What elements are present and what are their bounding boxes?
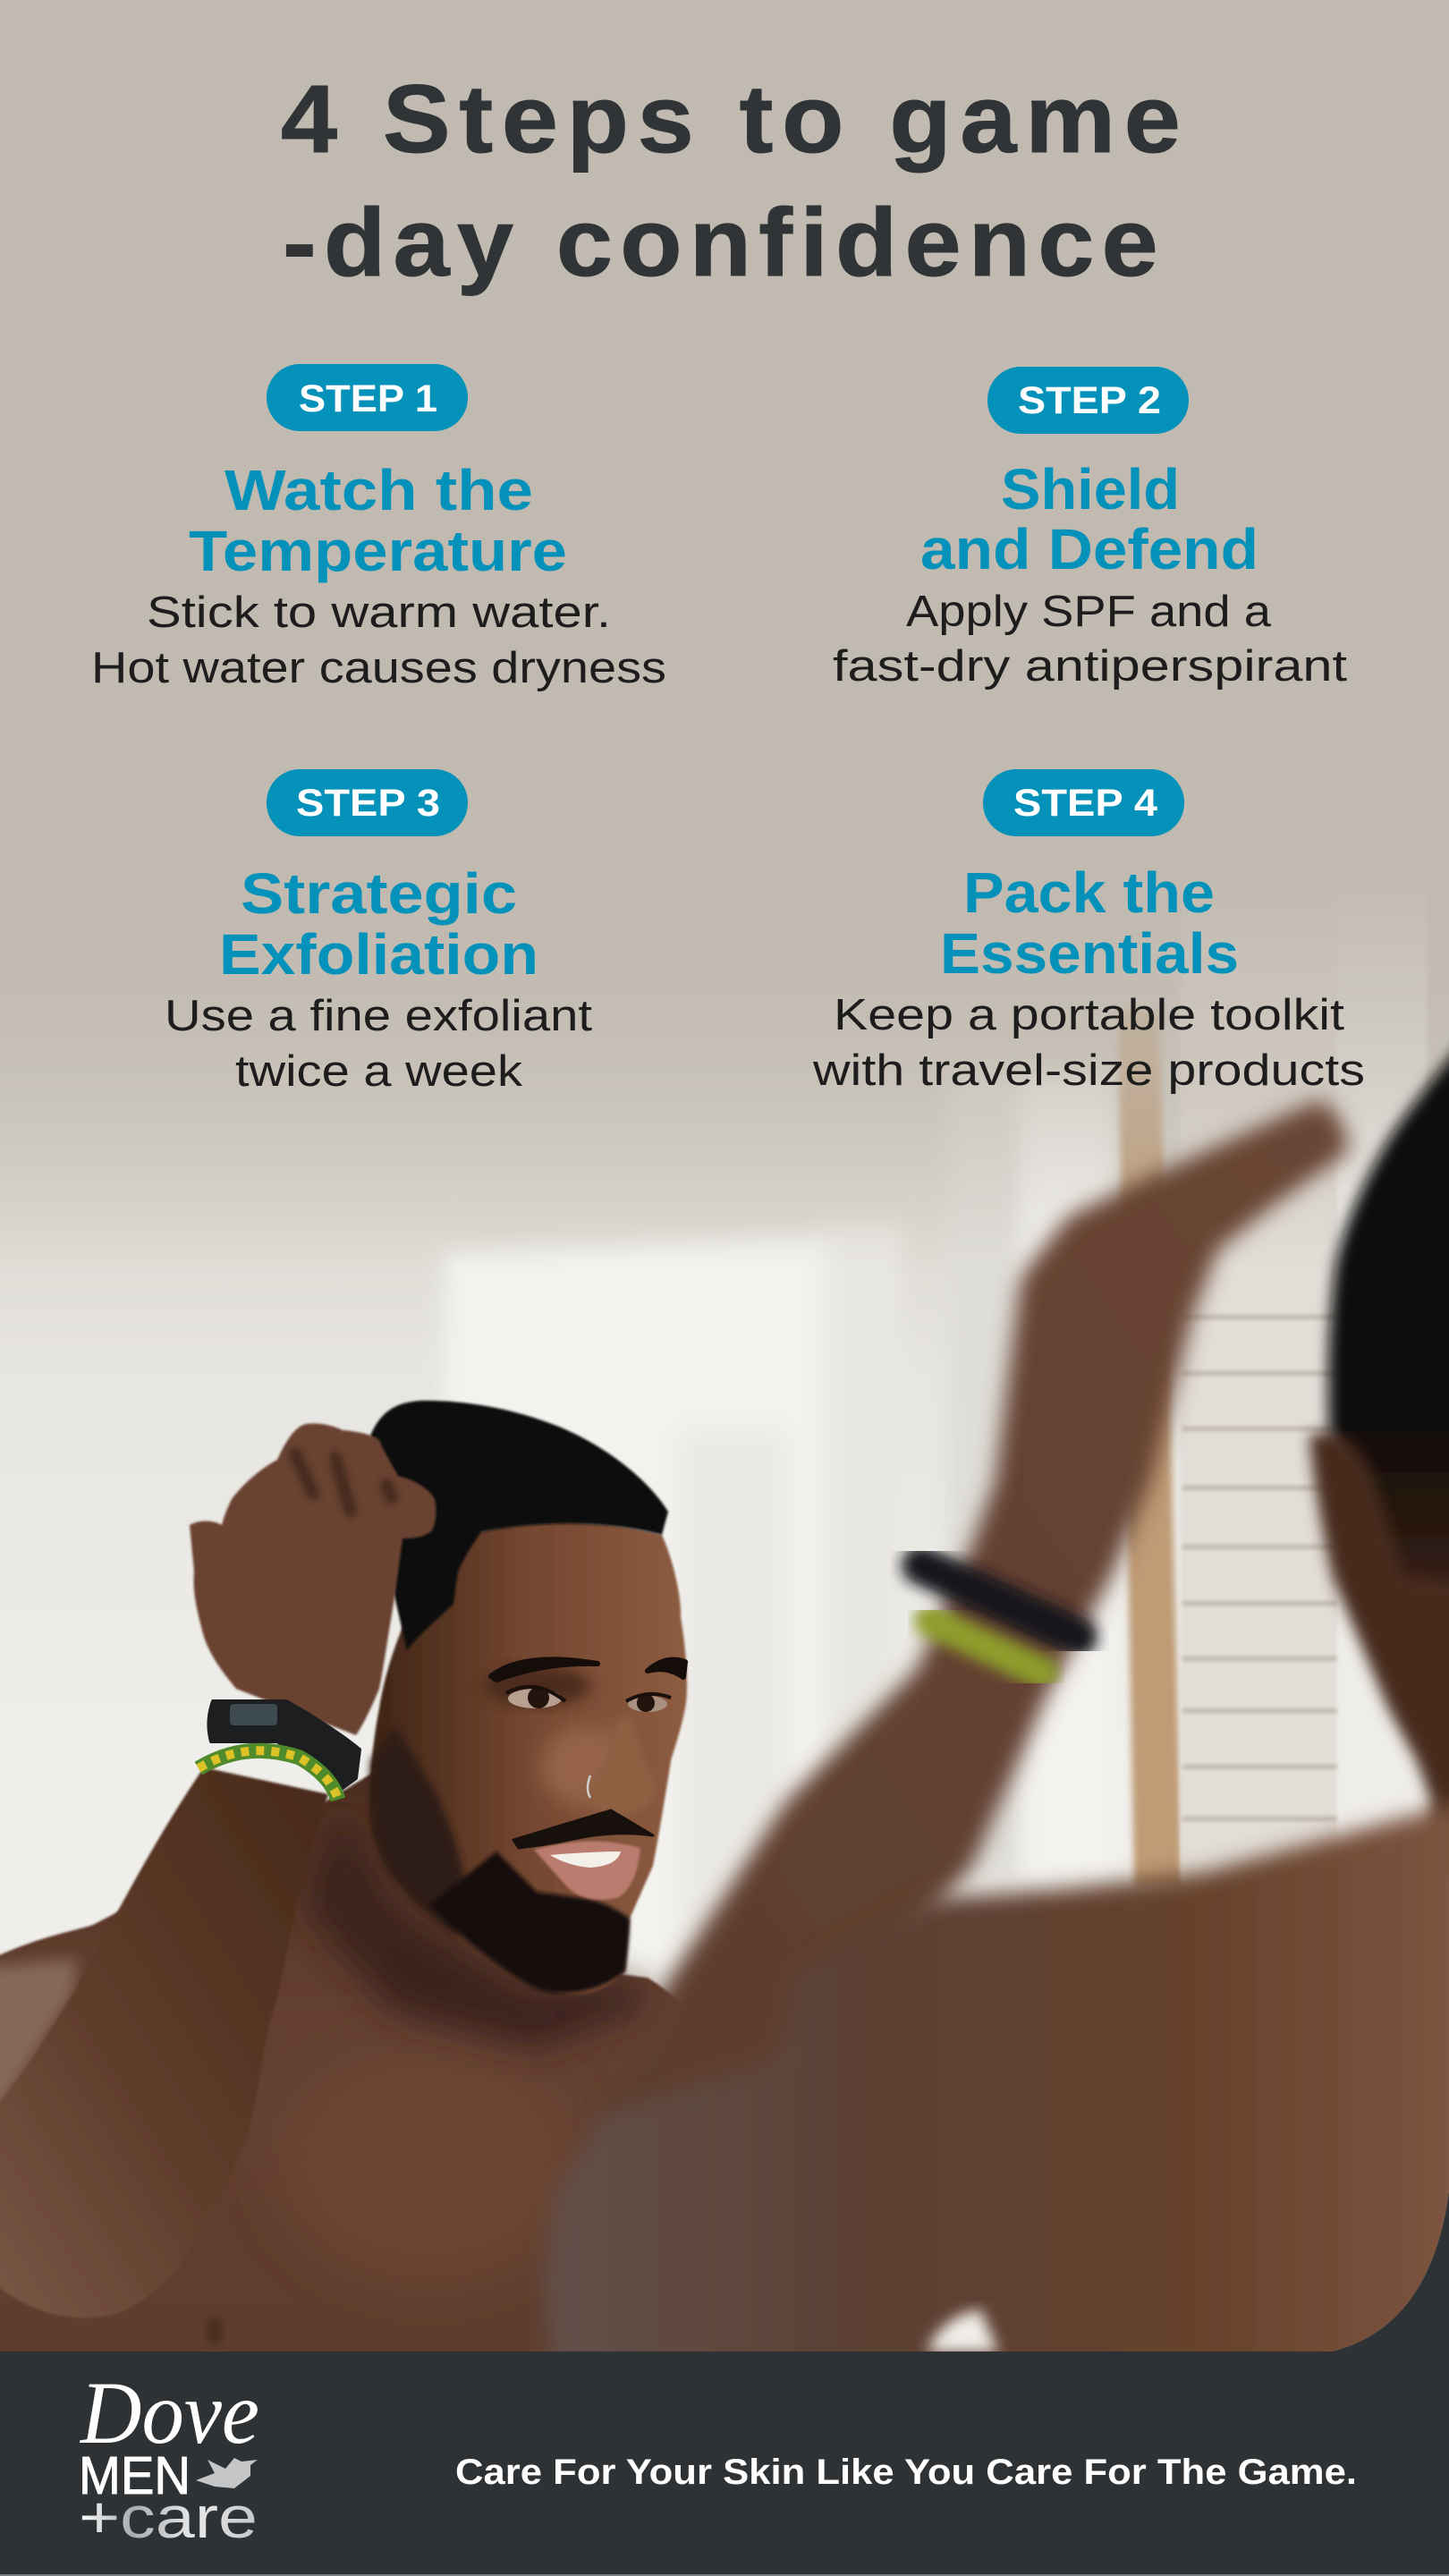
raised arm (0, 1767, 328, 2318)
title (281, 65, 1181, 296)
heading: step 2 (920, 457, 1258, 581)
torso (0, 1773, 676, 2351)
back of head (1328, 1038, 1449, 1601)
cheek highlight (541, 1726, 631, 1807)
background photo panel (0, 941, 1449, 2351)
heading: step 1 (189, 458, 567, 583)
neck shadow (304, 1807, 653, 2048)
body text: step 4: Keep a portable toolkit (834, 991, 1344, 1039)
shutter slats (1179, 950, 1427, 1882)
mouth (534, 1841, 640, 1900)
wall background (0, 1076, 1449, 2349)
heading: step 3: Exfoliation (219, 922, 538, 987)
logo wordmark: +care: +care (79, 2484, 258, 2550)
logo: Dove Men+Care (79, 2363, 259, 2550)
blurred black wristband (921, 1565, 1078, 1637)
body text: step 2: fast-dry antiperspirant (833, 642, 1347, 691)
man in mirror (0, 1401, 716, 2379)
heading: step 3: Strategic (241, 861, 517, 926)
heading: step 2: Shield (1001, 457, 1180, 521)
panel: step 2 (833, 367, 1347, 691)
body text: step 2 (833, 588, 1347, 691)
hair (370, 1401, 668, 1650)
title: 4 Steps to game (281, 65, 1181, 173)
panel: step 3 (165, 769, 592, 1096)
watch screen (230, 1704, 277, 1725)
ear and neck (1309, 1433, 1449, 1878)
eye socket shading (483, 1666, 590, 1706)
nose (586, 1717, 656, 1816)
body text: step 2: Apply SPF and a (906, 588, 1272, 636)
blurred green bracelet (930, 1621, 1042, 1673)
knuckles (295, 1453, 392, 1512)
blurred foreground figure (543, 1038, 1449, 2379)
sideburn stubble (370, 1726, 465, 1936)
bracelet (199, 1750, 338, 1800)
tagline: Care For Your Skin Like You Care For The Game. (455, 2453, 1357, 2492)
icon: dove bird (196, 2458, 258, 2488)
body text: step 4: with travel-size products (812, 1046, 1365, 1095)
badge: step 3: STEP 3 (296, 782, 440, 825)
badge: step 2 (987, 367, 1189, 434)
body text: step 1 (91, 589, 666, 692)
face (369, 1522, 687, 1995)
heading: step 4: Pack the (963, 860, 1215, 925)
blurred window frame (948, 1073, 1118, 1878)
far shoulder highlight (0, 1953, 81, 2102)
body text: step 3 (165, 992, 592, 1096)
panel: step 1 (91, 364, 666, 692)
nipple (206, 2317, 224, 2345)
heading: step 1: Watch the (225, 458, 533, 522)
eyes (506, 1687, 671, 1712)
watch (208, 1701, 360, 1792)
body text: step 1: Hot water causes dryness (91, 644, 666, 692)
badge: step 2: STEP 2 (1018, 379, 1161, 422)
logo wordmark: Dove: Dove (79, 2363, 259, 2462)
heading: step 1: Temperature (189, 519, 567, 583)
badge: step 4: STEP 4 (1013, 782, 1157, 825)
badge: step 4 (983, 769, 1184, 836)
chin beard (429, 1852, 630, 1993)
tan top fade (0, 803, 1449, 1229)
chest highlight (297, 2085, 553, 2267)
heading: step 2: and Defend (920, 517, 1258, 581)
body text: step 1: Stick to warm water. (147, 589, 611, 637)
teeth (550, 1852, 621, 1868)
badge: step 1: STEP 1 (299, 377, 437, 420)
blurred door panel (440, 1229, 896, 1563)
heading: step 3 (219, 861, 538, 987)
moustache (513, 1810, 653, 1848)
wooden post (1118, 1011, 1182, 1887)
badge: step 3 (267, 769, 468, 836)
title: -day confidence (283, 189, 1158, 296)
brows (491, 1659, 685, 1680)
badge: step 1 (267, 364, 468, 431)
body text: step 3: twice a week (235, 1047, 523, 1096)
logo wordmark: MEN: MEN (79, 2446, 191, 2505)
heading: step 4: Essentials (940, 921, 1239, 986)
heading: step 4 (940, 860, 1239, 986)
mirror gap highlight (927, 2309, 998, 2352)
foreground shoulder (543, 1801, 1449, 2379)
hand (190, 1424, 436, 1735)
foreground arm (592, 1102, 1349, 2200)
nose ring (588, 1775, 590, 1798)
footer bar (0, 2191, 1449, 2576)
body text: step 3: Use a fine exfoliant (165, 992, 592, 1040)
body text: step 4 (812, 991, 1365, 1095)
panel: step 4 (812, 769, 1365, 1095)
